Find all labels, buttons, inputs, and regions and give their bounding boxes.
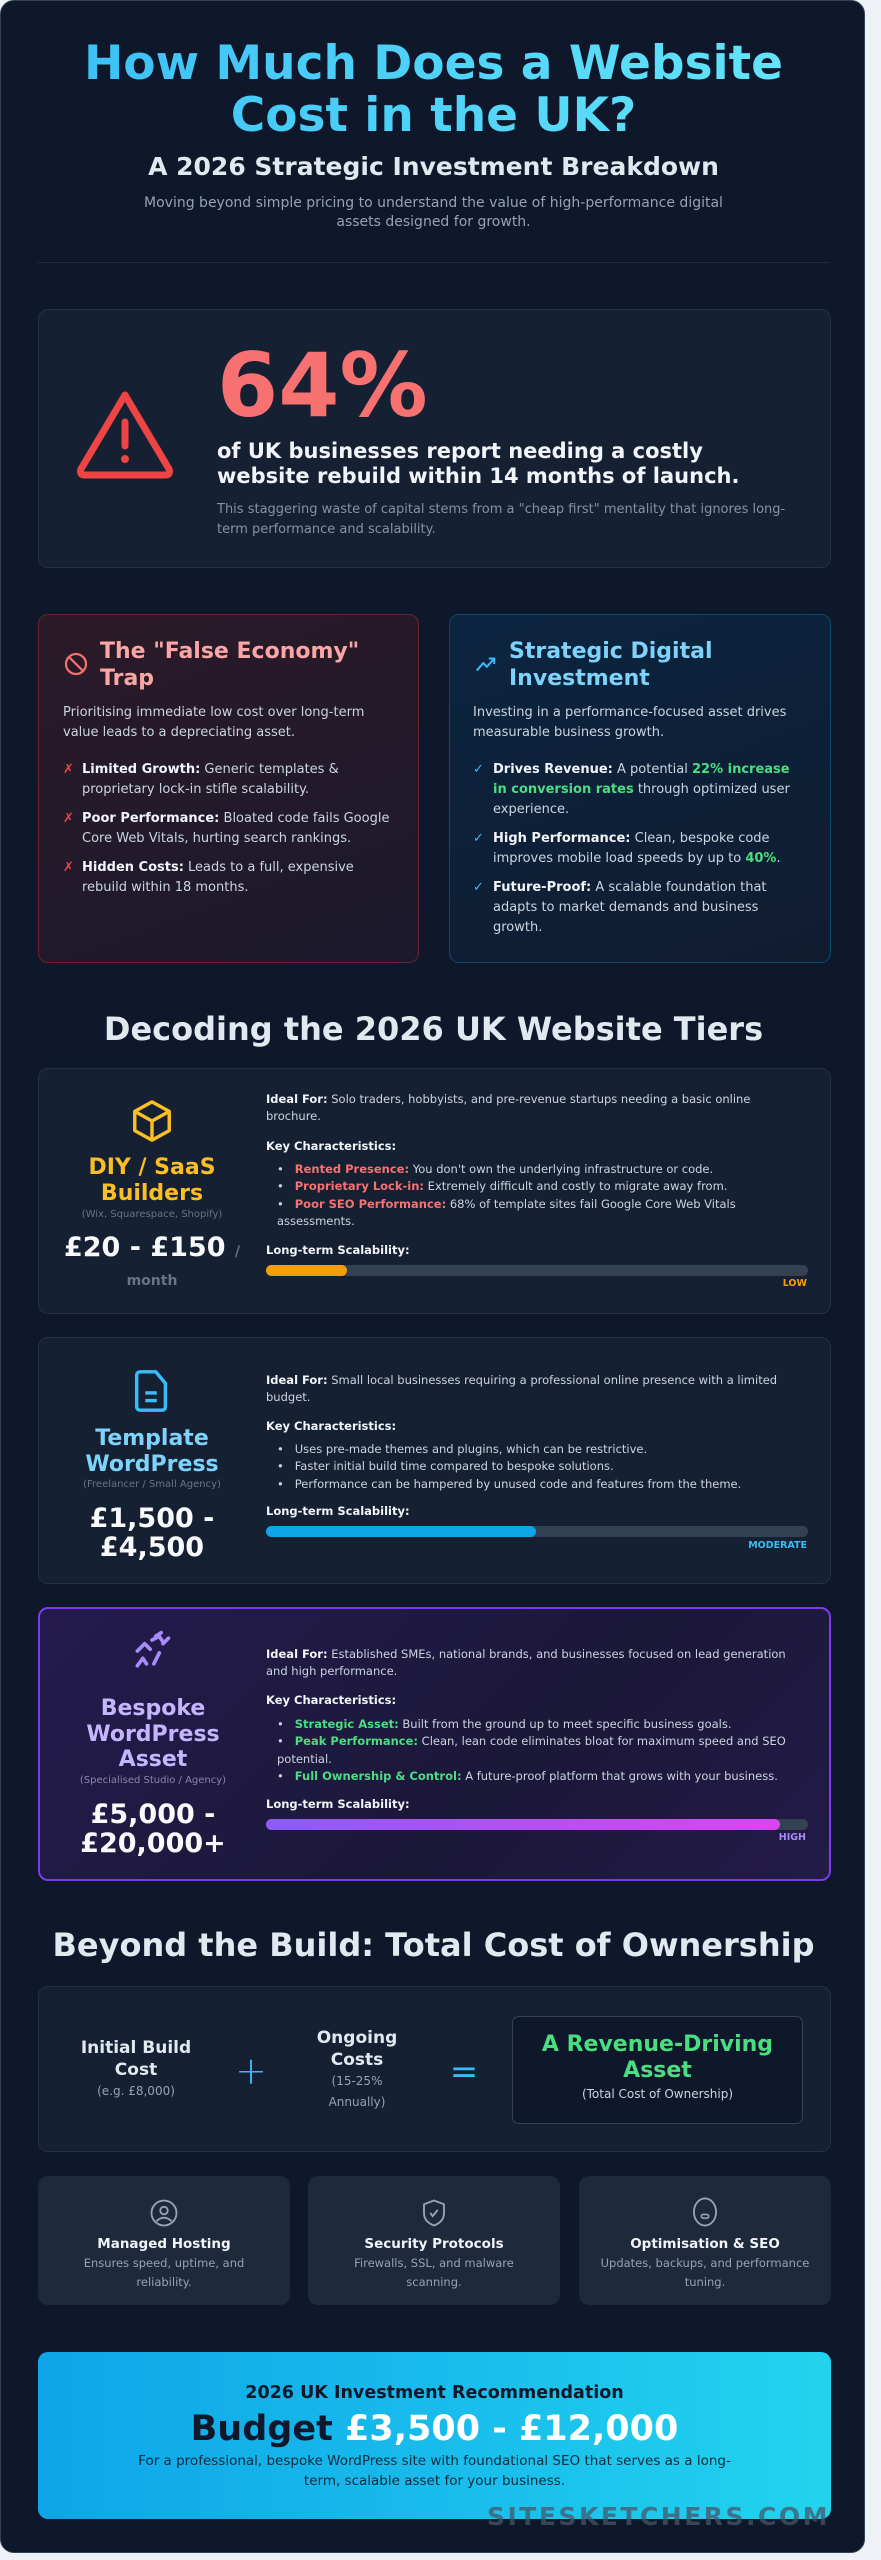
initial build [81,2038,191,2098]
card: optimisation: tuning. [685,2275,725,2289]
panel: tier DIY: • Proprietary Lock-in: Extremely difficult and costly to migrate away from. [277,1179,727,1193]
description [63,705,364,740]
stat statement: of UK businesses report needing a costly [217,439,703,463]
price: £20,000+ [80,1828,226,1859]
tier name: DIY / SaaS [88,1155,216,1180]
stat note: This staggering waste of capital stems from a "cheap first" mentality that ignores long- [217,502,785,517]
intro text [144,195,723,230]
details: brochure. [266,1109,321,1123]
tier name [86,1696,220,1772]
list of benefits: ✓ [473,762,484,777]
icon: trending up [476,658,496,672]
list of risks: ✗ [63,811,74,826]
panel: tier DIY: LOW [783,1278,807,1289]
initial build: (e.g. £8,000) [97,2084,175,2098]
details: Ideal For: Small local businesses requiring a professional online presence with a limited [266,1373,777,1387]
budget figure: Budget £3,500 - £12,000 [191,2409,678,2449]
details [266,1647,786,1678]
heading [509,639,712,691]
panel: tier template: (Freelancer / Small Agency) [83,1479,221,1490]
description: value leads to a depreciating asset. [63,725,295,740]
list of benefits: growth. [493,920,542,935]
intro text: assets designed for growth. [336,214,531,230]
callout: recommendation: For a professional, bespoke WordPress site with foundational SEO that serves as a long- [138,2453,731,2469]
panel: tier bespoke: HIGH [779,1832,806,1843]
initial build: Initial Build [81,2038,191,2058]
panel: false economy [38,614,419,963]
card: optimisation: Optimisation & SEO [630,2236,780,2252]
initial build: Cost [115,2060,157,2080]
panel: tier bespoke [38,1607,831,1881]
stat statement: website rebuild within 14 months of launch. [217,464,739,488]
ongoing costs: Ongoing [317,2028,397,2048]
list of benefits: Drives Revenue: A potential 22% increase [493,762,790,777]
panel: tier DIY: Key Characteristics: [266,1139,396,1153]
list of risks: Poor Performance: Bloated code fails Google [82,811,389,826]
icon: shield [423,2200,445,2226]
tier name [85,1426,219,1477]
list of benefits: ✓ [473,880,484,895]
tier name: WordPress [85,1452,219,1477]
panel: tier DIY: • Poor SEO Performance: 68% of template sites fail Google Core Web Vitals [277,1197,736,1211]
heading: Trap [100,666,154,691]
tier name: WordPress [86,1722,220,1746]
callout: recommendation: term, scalable asset for your business. [304,2473,565,2489]
icon: warning [77,392,173,478]
panel: tier bespoke: Key Characteristics: [266,1693,396,1707]
ongoing costs: (15-25% [332,2074,382,2088]
details: and high performance. [266,1664,397,1678]
price [80,1799,226,1859]
result box: A Revenue-Driving [542,2032,773,2057]
tier name: Template [95,1426,209,1451]
panel: tier bespoke: • Strategic Asset: Built from the ground up to meet specific business goals. [277,1717,732,1731]
panel: tier template: • Performance can be hampered by unused code and features from the theme. [277,1477,741,1491]
panel: tier bespoke: (Specialised Studio / Agency) [80,1775,226,1786]
details: budget. [266,1390,310,1404]
heading: The "False Economy" [100,639,359,664]
tier name: Bespoke [101,1696,205,1721]
panel: tier template: Long-term Scalability: [266,1504,410,1518]
title: How Much Does a Website [84,36,783,91]
icon: file [134,1370,168,1412]
panel: tier DIY: • Rented Presence: You don't own the underlying infrastructure or code. [277,1162,713,1176]
list of risks [63,762,389,895]
panel: tier DIY [38,1068,831,1314]
list of risks: rebuild within 18 months. [82,880,248,895]
list of benefits: experience. [493,802,569,817]
list of benefits: improves mobile load speeds by up to 40%. [493,851,781,866]
stat note [216,502,785,537]
card: security: scanning. [406,2275,462,2289]
title [1,38,866,142]
details [266,1092,750,1123]
ongoing costs: Annually) [329,2095,385,2109]
heading: total cost of ownership: Beyond the Build: Total Cost of Ownership [53,1926,814,1964]
title: Cost in the UK? [231,88,636,143]
scalability bar [266,1265,808,1276]
details: Ideal For: Established SMEs, national brands, and businesses focused on lead generation [266,1647,786,1661]
plus sign: + [235,2049,267,2093]
icon: cube [133,1100,171,1142]
card: managed hosting: reliability. [136,2275,192,2289]
icon: wand sparkles [135,1630,170,1668]
heading [100,639,359,691]
price: £4,500 [100,1532,204,1563]
card: managed hosting: Ensures speed, uptime, and [84,2256,244,2270]
list of benefits: in conversion rates through optimized user [493,782,790,797]
watermark: SITESKETCHERS.COM [487,2502,830,2531]
panel: strategic investment [449,614,831,963]
list of risks: ✗ [63,762,74,777]
list of benefits: High Performance: Clean, bespoke code [493,831,770,846]
description: measurable business growth. [473,725,664,740]
details: Ideal For: Solo traders, hobbyists, and pre-revenue startups needing a basic online [266,1092,750,1106]
intro text: Moving beyond simple pricing to understand the value of high-performance digital [144,195,723,211]
heading: Investment [509,666,650,691]
panel: tier DIY: assessments. [277,1214,355,1228]
panel: tier bespoke: Long-term Scalability: [266,1797,410,1811]
scalability bar [266,1819,808,1830]
list of benefits: ✓ [473,831,484,846]
list of benefits: adapts to market demands and business [493,900,758,915]
price: £5,000 - [91,1799,215,1830]
heading: tiers: Decoding the 2026 UK Website Tiers [104,1010,763,1048]
list of risks: Hidden Costs: Leads to a full, expensive [82,860,354,875]
description: Investing in a performance-focused asset drives [473,705,786,720]
panel: tier bespoke: • Full Ownership & Control: A future-proof platform that grows with your business. [277,1769,778,1783]
tier sub: (Wix, Squarespace, Shopify) [82,1209,222,1220]
scalability bar [266,1526,808,1537]
price: £20 - £150 / [64,1232,240,1263]
description [473,705,786,740]
equals sign: = [450,2052,478,2092]
card: managed hosting [38,2176,290,2305]
card: security: Firewalls, SSL, and malware [354,2256,514,2270]
list of risks: proprietary lock-in stifle scalability. [82,782,309,797]
result box [512,2016,803,2124]
icon: user circle [150,2200,178,2226]
panel: tier bespoke: • Peak Performance: Clean, lean code eliminates bloat for maximum speed and SEO [277,1734,786,1748]
card: managed hosting: Managed Hosting [97,2236,231,2252]
ongoing costs: Costs [331,2050,383,2070]
result box: Asset [623,2058,692,2083]
card: security [308,2176,560,2305]
list of risks: Limited Growth: Generic templates & [82,762,339,777]
list of benefits: Future-Proof: A scalable foundation that [493,880,767,895]
tier name: Asset [119,1747,187,1772]
panel: TCO equation [38,1986,831,2152]
description: Prioritising immediate low cost over long-term [63,705,364,720]
panel: tier template: • Uses pre-made themes and plugins, which can be restrictive. [277,1442,647,1456]
list of risks: Core Web Vitals, hurting search rankings. [82,831,351,846]
big stat: 64% [217,334,428,437]
tier name [88,1155,216,1206]
panel: tier DIY: Long-term Scalability: [266,1243,410,1257]
panel: tier template: MODERATE [748,1540,807,1551]
ongoing costs [317,2028,397,2109]
stat statement [217,439,739,488]
tier name: Builders [101,1181,203,1206]
icon: ban [64,652,88,676]
panel: tier template: Key Characteristics: [266,1419,396,1433]
subtitle: A 2026 Strategic Investment Breakdown [148,152,719,181]
callout: recommendation: 2026 UK Investment Recommendation [245,2383,624,2403]
panel: tier template: • Faster initial build time compared to bespoke solutions. [277,1459,614,1473]
list of risks: ✗ [63,860,74,875]
panel: tier bespoke: potential. [277,1752,332,1766]
heading: Strategic Digital [509,639,712,664]
card: optimisation [579,2176,831,2305]
panel: tier template [38,1337,831,1584]
card: security: Security Protocols [364,2236,504,2252]
icon: gauge [693,2198,717,2226]
price [90,1503,214,1563]
callout: recommendation [38,2352,831,2519]
stat note: term performance and scalability. [217,522,436,537]
details [266,1373,777,1404]
list of benefits [473,762,790,935]
result box: (Total Cost of Ownership) [582,2087,733,2101]
price: £1,500 - [90,1503,214,1534]
card: optimisation: Updates, backups, and performance [601,2256,809,2270]
panel: statistic [38,309,831,568]
panel: tier DIY: month [127,1273,177,1289]
